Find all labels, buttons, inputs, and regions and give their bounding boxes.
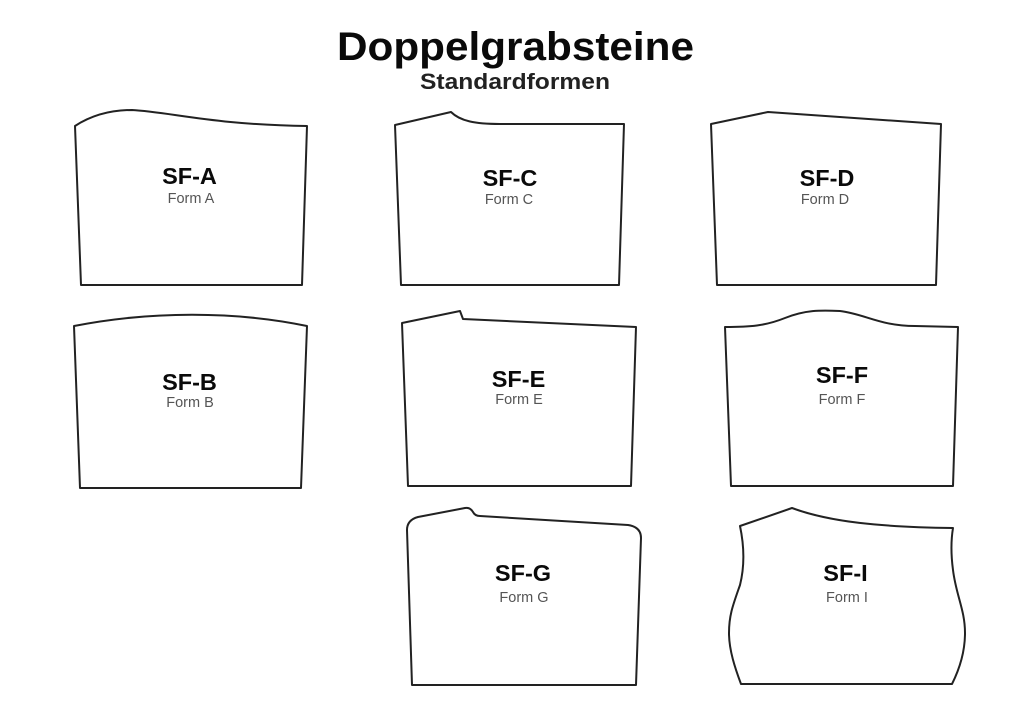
panel: SF-F bbox=[725, 311, 958, 486]
subtitle: Standardformen bbox=[420, 69, 610, 94]
panel: SF-G bbox=[407, 508, 641, 685]
panel: SF-G: SF-G bbox=[495, 560, 551, 586]
panel: SF-F: Form F bbox=[819, 392, 865, 408]
panel: SF-E: SF-E bbox=[492, 366, 545, 392]
panel: SF-F: SF-F bbox=[816, 362, 868, 388]
panel: SF-D: SF-D bbox=[800, 165, 854, 191]
panel: SF-I: SF-I bbox=[823, 560, 868, 586]
panel: SF-B bbox=[74, 315, 307, 488]
panel: SF-E: Form E bbox=[495, 392, 543, 408]
panel: SF-D: Form D bbox=[801, 192, 849, 208]
panel: SF-B: SF-B bbox=[162, 369, 217, 395]
panel: SF-B: Form B bbox=[166, 395, 214, 411]
panel: SF-I bbox=[729, 508, 965, 684]
panel: SF-A bbox=[75, 110, 307, 285]
panel: SF-E bbox=[402, 311, 636, 486]
panel: SF-G: Form G bbox=[499, 590, 549, 606]
panel: SF-D bbox=[711, 112, 941, 285]
panel: SF-C: SF-C bbox=[483, 165, 537, 191]
panel: SF-C bbox=[395, 112, 624, 285]
panel: SF-A: Form A bbox=[168, 191, 215, 207]
panel: SF-A: SF-A bbox=[162, 163, 217, 189]
title: Doppelgrabsteine bbox=[337, 25, 694, 69]
panel: SF-C: Form C bbox=[485, 192, 533, 208]
panel: SF-I: Form I bbox=[826, 590, 868, 606]
